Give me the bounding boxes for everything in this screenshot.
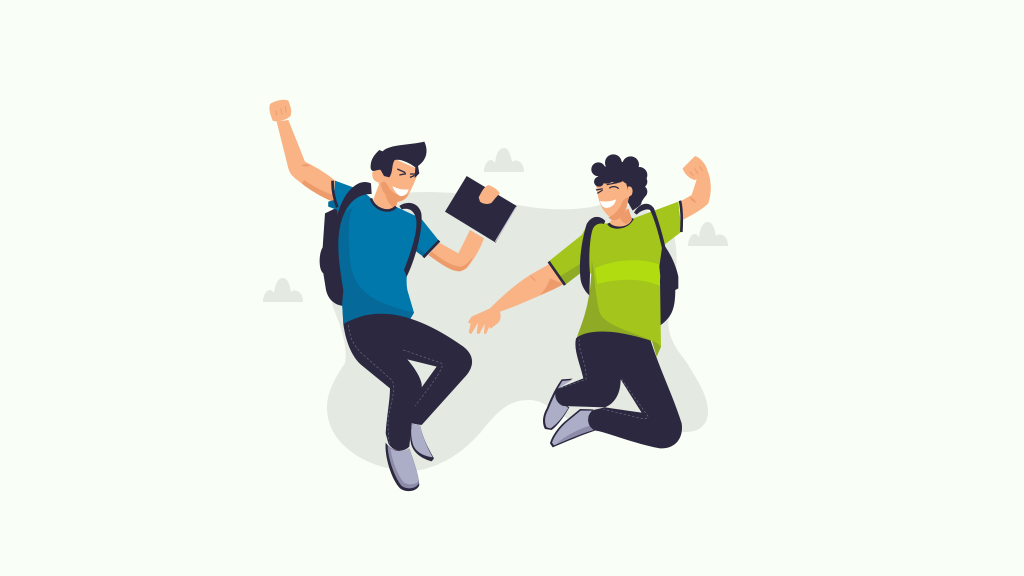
backpack straps [333,182,372,306]
shirt body [548,202,682,357]
sleeve cuffs and collar [333,181,439,257]
lower arm [428,230,484,271]
shirt shade [559,260,661,357]
figure: student in blue shirt [269,100,517,491]
eyes [397,169,417,177]
blue student upper body [269,100,517,332]
smile [392,186,409,196]
backpack body [653,240,678,326]
backpack [320,207,343,306]
hair [371,142,427,178]
hair back [627,177,645,211]
book [445,176,517,243]
shirt shadow [337,207,414,332]
fist [269,100,291,121]
curly hair [591,154,647,207]
green student shirt [468,154,711,357]
blue shirt [328,181,438,332]
backpack straps [580,217,605,295]
neck [373,180,400,209]
cloud: top centre [484,148,524,172]
smile [600,199,616,208]
head [596,179,631,219]
background blob [327,192,708,471]
blue student shoes [386,424,434,491]
right fist [683,156,707,180]
green student trousers [555,331,682,448]
cuffs and collar [549,201,682,285]
green student shoes [543,379,595,447]
right arm [682,170,711,220]
cloud: right [688,222,728,246]
left arm [468,264,563,334]
hand on book [479,185,500,204]
eyes [596,183,619,193]
shirt highlight band [595,260,660,286]
ear [628,186,633,197]
blue student trousers [343,314,472,451]
raised arm [277,120,337,203]
cloud: left [263,278,303,302]
neck [610,208,632,227]
head [372,158,419,201]
figure: student in green shirt [468,154,711,448]
